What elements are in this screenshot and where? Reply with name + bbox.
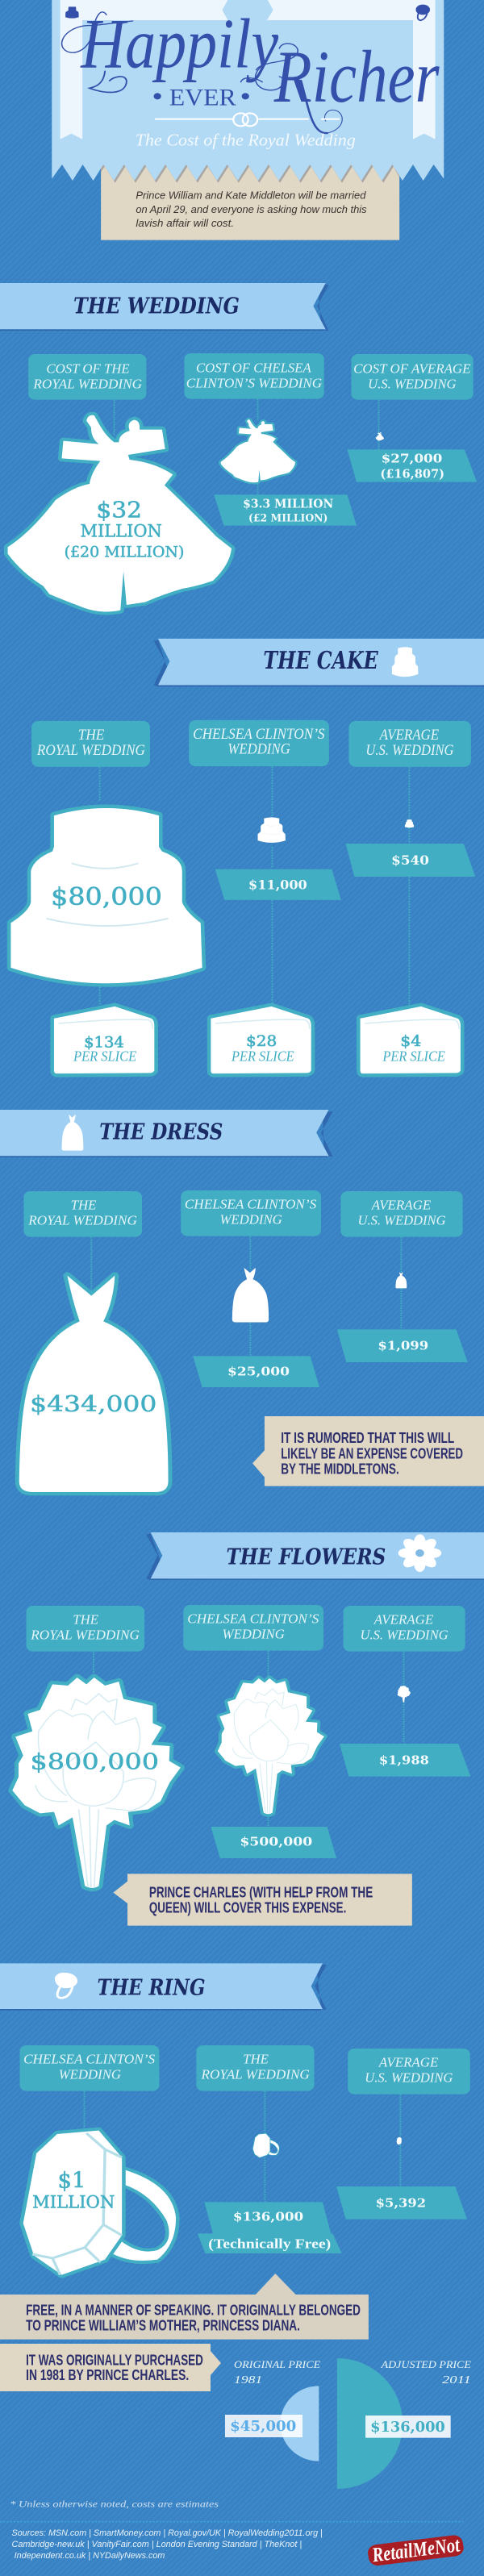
slice: average	[361, 1007, 461, 1073]
chart: original price half circle	[280, 2386, 319, 2461]
label: average wedding: U.S. WEDDING	[361, 1628, 449, 1642]
label: chelsea wedding	[183, 1605, 323, 1651]
label: average wedding	[344, 1606, 465, 1652]
callout: middletons: BY THE MIDDLETONS.	[281, 1461, 399, 1478]
header	[52, 0, 444, 240]
label: adjusted price	[381, 2359, 472, 2386]
section: the wedding	[0, 283, 477, 612]
label: average wedding cost	[351, 354, 474, 400]
intro text	[136, 190, 367, 229]
beige intro panel	[101, 161, 399, 240]
value: 45,000	[225, 2415, 302, 2437]
section: the cake	[10, 639, 484, 1073]
label: average wedding	[340, 1191, 463, 1237]
value: 1,988	[340, 1744, 471, 1777]
label: royal wedding	[31, 721, 150, 767]
label: average wedding: U.S. WEDDING	[365, 742, 454, 759]
label: chelsea wedding cost: COST OF CHELSEA	[196, 360, 312, 375]
value: 136,000	[365, 2416, 451, 2438]
value: 3.3 million	[214, 494, 357, 526]
value: 25,000: $25,000	[227, 1365, 290, 1378]
ribbon: the wedding	[0, 283, 329, 331]
sources: Cambridge-new.uk | VanityFair.com | London Evening Standard | TheKnot |	[12, 2539, 302, 2549]
light blue torn panel	[52, 0, 444, 181]
label: average wedding: AVERAGE	[373, 1612, 433, 1627]
title: Happily	[80, 3, 279, 83]
icon: tiny dress	[395, 1272, 407, 1288]
icon: ring	[55, 1973, 77, 1998]
title: EVER	[169, 84, 236, 110]
label: original price	[234, 2359, 321, 2386]
icon: ring	[415, 5, 430, 20]
label: chelsea wedding	[181, 1190, 321, 1236]
icon: dress	[62, 1115, 83, 1151]
label: royal wedding	[23, 1191, 142, 1237]
icon: big ring	[23, 2131, 176, 2275]
label: average wedding: AVERAGE	[378, 2055, 438, 2070]
label: chelsea wedding: CHELSEA CLINTON’S	[187, 1611, 319, 1626]
value: 1,988: $1,988	[379, 1753, 429, 1767]
ribbon: the flowers: THE FLOWERS	[226, 1544, 386, 1569]
label: royal wedding: ROYAL WEDDING	[36, 742, 145, 759]
label: chelsea wedding: WEDDING	[223, 1627, 285, 1641]
label: average wedding: U.S. WEDDING	[357, 1213, 446, 1228]
label: average wedding: AVERAGE	[371, 1198, 431, 1212]
slice: royal: $134	[84, 1035, 124, 1052]
value: 1 million: $1	[58, 2167, 86, 2193]
icon: big bells	[8, 415, 232, 612]
label: royal wedding: THE	[71, 1198, 96, 1212]
connectors	[115, 399, 379, 494]
section: the ring	[0, 1963, 470, 2275]
white ribbon	[60, 0, 436, 140]
label: average wedding: AVERAGE	[378, 727, 440, 744]
callout: purchased: IT WAS ORIGINALLY PURCHASED	[26, 2353, 203, 2369]
value: 1 million	[32, 2167, 115, 2212]
value: 540: $540	[391, 852, 429, 868]
intro text: Prince William and Kate Middleton will be married	[136, 190, 366, 201]
ribbon: the cake: THE CAKE	[263, 647, 379, 675]
label: royal wedding: THE	[73, 1612, 98, 1627]
icon: tiny bells	[376, 432, 384, 440]
icon: big bouquet	[12, 1678, 181, 1888]
slice: average: PER SLICE	[382, 1048, 445, 1065]
ribbon: the wedding: THE WEDDING	[73, 294, 240, 319]
label: original price: ORIGINAL PRICE	[234, 2359, 321, 2370]
value: 136,000 technically free	[198, 2202, 342, 2253]
label: royal wedding	[196, 2045, 315, 2091]
slice: chelsea: PER SLICE	[231, 1048, 294, 1065]
sources	[12, 2528, 323, 2561]
callout: free: TO PRINCE WILLIAM’S MOTHER, PRINCESS DIANA.	[26, 2318, 300, 2334]
value: 1 million: MILLION	[32, 2193, 115, 2212]
callout: free	[0, 2274, 369, 2340]
label: original price: 1981	[234, 2374, 262, 2386]
hexagon tab	[223, 0, 273, 20]
section: the flowers	[12, 1532, 484, 1926]
sources: Sources: MSN.com | SmartMoney.com | Royal.gov/UK | RoyalWedding2011.org |	[12, 2528, 323, 2538]
connectors	[91, 1236, 401, 1356]
value: 3.3 million: $3.3 MILLION	[243, 496, 333, 511]
value: 32 million: MILLION	[80, 522, 162, 541]
label: royal wedding	[27, 1606, 144, 1652]
label: royal wedding: THE	[243, 2052, 269, 2066]
label: average wedding cost: U.S. WEDDING	[368, 376, 457, 391]
label: royal wedding cost	[28, 354, 146, 400]
icon: medium ring	[253, 2134, 279, 2157]
icon: medium dress	[232, 1268, 269, 1322]
chart: adjusted price half circle	[337, 2358, 403, 2489]
intro text: lavish affair will cost.	[136, 218, 234, 229]
callout: purchased: IN 1981 BY PRINCE CHARLES.	[26, 2367, 189, 2384]
value: 27,000: (£16,807)	[380, 466, 444, 481]
ribbon: the ring	[0, 1963, 327, 2011]
label: royal wedding: ROYAL WEDDING	[30, 1628, 140, 1642]
section: the dress	[0, 1110, 484, 1492]
icon: medium bells	[221, 419, 295, 482]
intro text: on April 29, and everyone is asking how much this	[136, 204, 367, 215]
value: 5,392	[336, 2186, 467, 2220]
value: 1,099: $1,099	[378, 1338, 428, 1353]
label: chelsea wedding cost	[184, 353, 324, 399]
value: 32 million: (£20 MILLION)	[65, 543, 184, 561]
icon: tiny cake	[405, 819, 414, 827]
label: royal wedding cost: ROYAL WEDDING	[32, 376, 142, 391]
slice: royal: PER SLICE	[73, 1048, 136, 1065]
label: chelsea wedding: WEDDING	[227, 741, 290, 758]
subtitle: The Cost of the Royal Wedding	[136, 131, 356, 149]
label: chelsea wedding cost: CLINTON’S WEDDING	[186, 375, 322, 390]
value: 27,000	[347, 449, 477, 482]
label: average wedding cost: COST OF AVERAGE	[353, 361, 471, 376]
icon: flower	[398, 1534, 441, 1572]
icon: tiny bouquet	[398, 1686, 411, 1703]
slice: average: $4	[400, 1033, 421, 1050]
footnote: * Unless otherwise noted, costs are estimates	[10, 2498, 219, 2509]
label: royal wedding: ROYAL WEDDING	[27, 1213, 137, 1228]
ribbon: the flowers	[146, 1532, 484, 1580]
title	[62, 3, 440, 133]
icon: big dress	[19, 1276, 169, 1492]
ribbon: the dress	[0, 1110, 332, 1157]
connectors	[94, 1651, 404, 1827]
label: adjusted price: 2011	[442, 2374, 471, 2386]
label: chelsea wedding: CHELSEA CLINTON’S	[23, 2052, 155, 2066]
icon: medium cake	[258, 817, 286, 843]
icon: tiny ring	[397, 2137, 402, 2145]
value: 11,000: $11,000	[248, 877, 307, 892]
value: 45,000: $45,000	[230, 2417, 296, 2435]
value: 1,099	[337, 1329, 468, 1362]
icon: cake	[392, 647, 418, 677]
icon: medium bouquet	[218, 1678, 324, 1814]
ribbon: the dress: THE DRESS	[99, 1119, 223, 1144]
label: chelsea wedding: CHELSEA CLINTON’S	[193, 726, 325, 743]
sources: Independent.co.uk | NYDailyNews.com	[15, 2550, 165, 2561]
label: average wedding	[348, 2049, 470, 2095]
value: 32 million: $32	[96, 498, 142, 523]
label: average wedding	[348, 721, 471, 767]
rings divider	[155, 113, 340, 126]
value: 136,000 technically free: (Technically Free)	[208, 2236, 331, 2252]
callout: purchased	[0, 2344, 221, 2391]
label: adjusted price: ADJUSTED PRICE	[381, 2359, 472, 2370]
value: 11,000	[215, 869, 341, 900]
section: ring footnotes	[0, 2274, 472, 2567]
value: 500,000	[211, 1827, 336, 1858]
slice: royal	[54, 1007, 154, 1073]
value: 5,392: $5,392	[376, 2196, 426, 2210]
value: 136,000 technically free: $136,000	[233, 2209, 303, 2224]
label: chelsea wedding: CHELSEA CLINTON’S	[185, 1197, 316, 1211]
value: 434,000: $434,000	[30, 1391, 156, 1416]
connectors	[84, 2091, 400, 2202]
ribbon: the cake	[154, 639, 484, 686]
label: chelsea wedding	[189, 720, 329, 766]
value: 540	[346, 844, 475, 877]
callout: middletons	[252, 1416, 484, 1486]
value: 136,000: $136,000	[370, 2418, 445, 2436]
callout: prince charles: QUEEN) WILL COVER THIS EXPENSE.	[149, 1900, 346, 1916]
icon: cake	[65, 6, 79, 19]
ribbon: the ring: THE RING	[98, 1974, 205, 2000]
label: chelsea wedding	[19, 2045, 159, 2091]
value: 80,000: $80,000	[51, 883, 162, 911]
slice: chelsea	[211, 1007, 311, 1073]
label: royal wedding cost: COST OF THE	[46, 361, 130, 376]
label: royal wedding: ROYAL WEDDING	[201, 2067, 310, 2082]
label: chelsea wedding: WEDDING	[219, 1212, 282, 1227]
value: 25,000	[193, 1356, 319, 1387]
connectors	[100, 766, 409, 1006]
value: 500,000: $500,000	[240, 1834, 312, 1849]
value: 3.3 million: (£2 MILLION)	[248, 513, 328, 524]
label: chelsea wedding: WEDDING	[59, 2067, 121, 2082]
callout: prince charles	[113, 1874, 412, 1926]
icon: big cake	[10, 808, 202, 983]
value: 32 million	[65, 498, 184, 561]
value: 800,000: $800,000	[30, 1749, 159, 1774]
label: royal wedding: THE	[78, 727, 105, 744]
slice: chelsea: $28	[246, 1033, 277, 1050]
value: 27,000: $27,000	[382, 451, 442, 465]
label: average wedding: U.S. WEDDING	[365, 2070, 453, 2085]
